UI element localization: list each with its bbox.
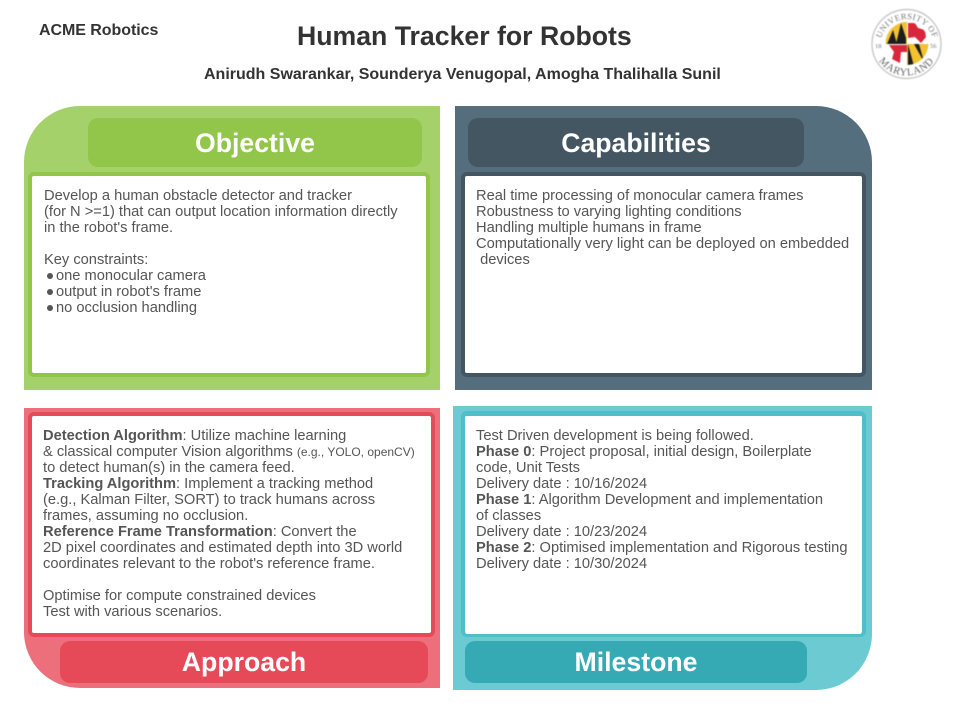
heading: Capabilities: Capabilities (561, 128, 711, 158)
icon: University of Maryland seal (870, 8, 942, 80)
icon: University of Maryland seal: MARYLAND (878, 56, 933, 76)
heading: Milestone: Milestone (575, 646, 697, 676)
heading: Milestone (465, 641, 807, 683)
authors: Anirudh Swarankar, Sounderya Venugopal, Amogha Thalihalla Sunil (204, 66, 721, 83)
capabilities text: Real time processing of monocular camera frames Robustness to varying lighting conditions Handling multiple humans in frame Computationally very light can be deployed on embedded devices (476, 188, 849, 268)
icon: University of Maryland seal: 56 (930, 43, 937, 50)
text box: objective (28, 172, 430, 377)
heading: Capabilities (468, 118, 804, 167)
objective text: Develop a human obstacle detector and tracker (for N >=1) that can output location information directly in the robot's frame. Key constraints: one monocular camera output in robot's frame no occlusion handling (44, 188, 398, 316)
text box: capabilities (461, 172, 866, 377)
panel: capabilities (455, 106, 872, 390)
text box: approach (28, 412, 435, 637)
text box: milestone (461, 411, 866, 637)
icon: University of Maryland seal: UNIVERSITY OF (876, 12, 938, 38)
icon: University of Maryland seal: 18 (875, 43, 882, 50)
panel: objective (24, 106, 440, 390)
panel: approach (24, 408, 440, 688)
milestone text: Test Driven development is being followed. Phase 0: Project proposal, initial design, Boilerplate code, Unit Tests Delivery date : 10/16/2024 Phase 1: Algorithm Development and implementation of classes Delivery date : 10/23/2024 Phase 2: Optimised implementation and Rigorous testing Delivery date : 10/30/2024 (476, 428, 848, 572)
label: ACME Robotics: ACME Robotics (39, 22, 158, 39)
heading: Objective: Objective (195, 128, 315, 158)
heading: Approach (60, 641, 428, 683)
heading: Approach: Approach (182, 646, 306, 676)
heading: Objective (88, 118, 422, 167)
approach text: Detection Algorithm: Utilize machine learning & classical computer Vision algorithms (e.g., YOLO, openCV) to detect human(s) in the camera feed. Tracking Algorithm: Implement a tracking method (e.g., Kalman Filter, SORT) to track humans across frames, assuming no occlusion. Reference Frame Transformation: Convert the 2D pixel coordinates and estimated depth into 3D world coordinates relevant to the robot's reference frame. Optimise for compute constrained devices Test with various scenarios. (43, 428, 415, 620)
title: Human Tracker for Robots (297, 21, 632, 51)
panel: milestone (453, 406, 872, 690)
